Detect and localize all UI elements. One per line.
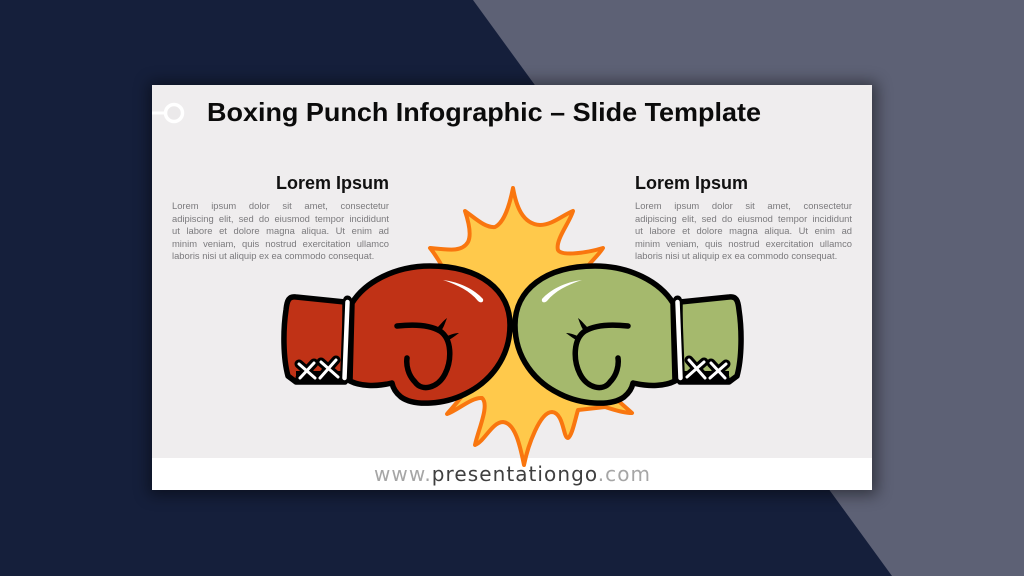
icon: title ring marker: [152, 104, 182, 122]
text block: right: minim veniam, quis nostrud exercitation ullamco: [635, 238, 852, 249]
text block: right: adipiscing elit, sed do eiusmod tempor incididunt: [635, 213, 852, 224]
laces: [683, 360, 729, 383]
thumb creases: [437, 318, 459, 341]
laces: [296, 360, 342, 383]
starburst: [430, 188, 632, 465]
cuff: [284, 297, 345, 382]
heading: left: Lorem Ipsum: [276, 173, 389, 193]
heading: right: Lorem Ipsum: [635, 173, 748, 193]
text block: right: ut labore et dolore magna aliqua. Ut enim ad: [635, 225, 852, 236]
footer url: www.presentationgo.com: [374, 462, 650, 486]
wrist band: [678, 300, 680, 380]
text block: right: laboris nisi ut aliquip ex ea commodo consequat.: [635, 250, 837, 261]
thumb: [397, 325, 450, 388]
text block: left: [172, 200, 389, 261]
text block: left: Lorem ipsum dolor sit amet, consectetur: [172, 200, 389, 211]
highlight: [443, 280, 483, 302]
red glove: [284, 266, 510, 403]
thumb: [575, 325, 628, 388]
text block: right: Lorem ipsum dolor sit amet, consectetur: [635, 200, 852, 211]
text block: right: [635, 200, 852, 261]
glove body: [515, 266, 675, 403]
green glove: [515, 266, 741, 403]
footer band: [152, 458, 872, 490]
wrist band: [344, 300, 348, 380]
text block: left: ut labore et dolore magna aliqua. Ut enim ad: [172, 225, 389, 236]
title: Boxing Punch Infographic – Slide Template: [207, 97, 761, 127]
slide card: [152, 85, 872, 490]
thumb creases: [566, 318, 588, 341]
highlight: [542, 280, 582, 302]
text block: left: laboris nisi ut aliquip ex ea commodo consequat.: [172, 250, 374, 261]
cuff: [680, 297, 741, 382]
glove body: [350, 266, 510, 403]
text block: left: minim veniam, quis nostrud exercitation ullamco: [172, 238, 389, 249]
text block: left: adipiscing elit, sed do eiusmod tempor incididunt: [172, 213, 389, 224]
